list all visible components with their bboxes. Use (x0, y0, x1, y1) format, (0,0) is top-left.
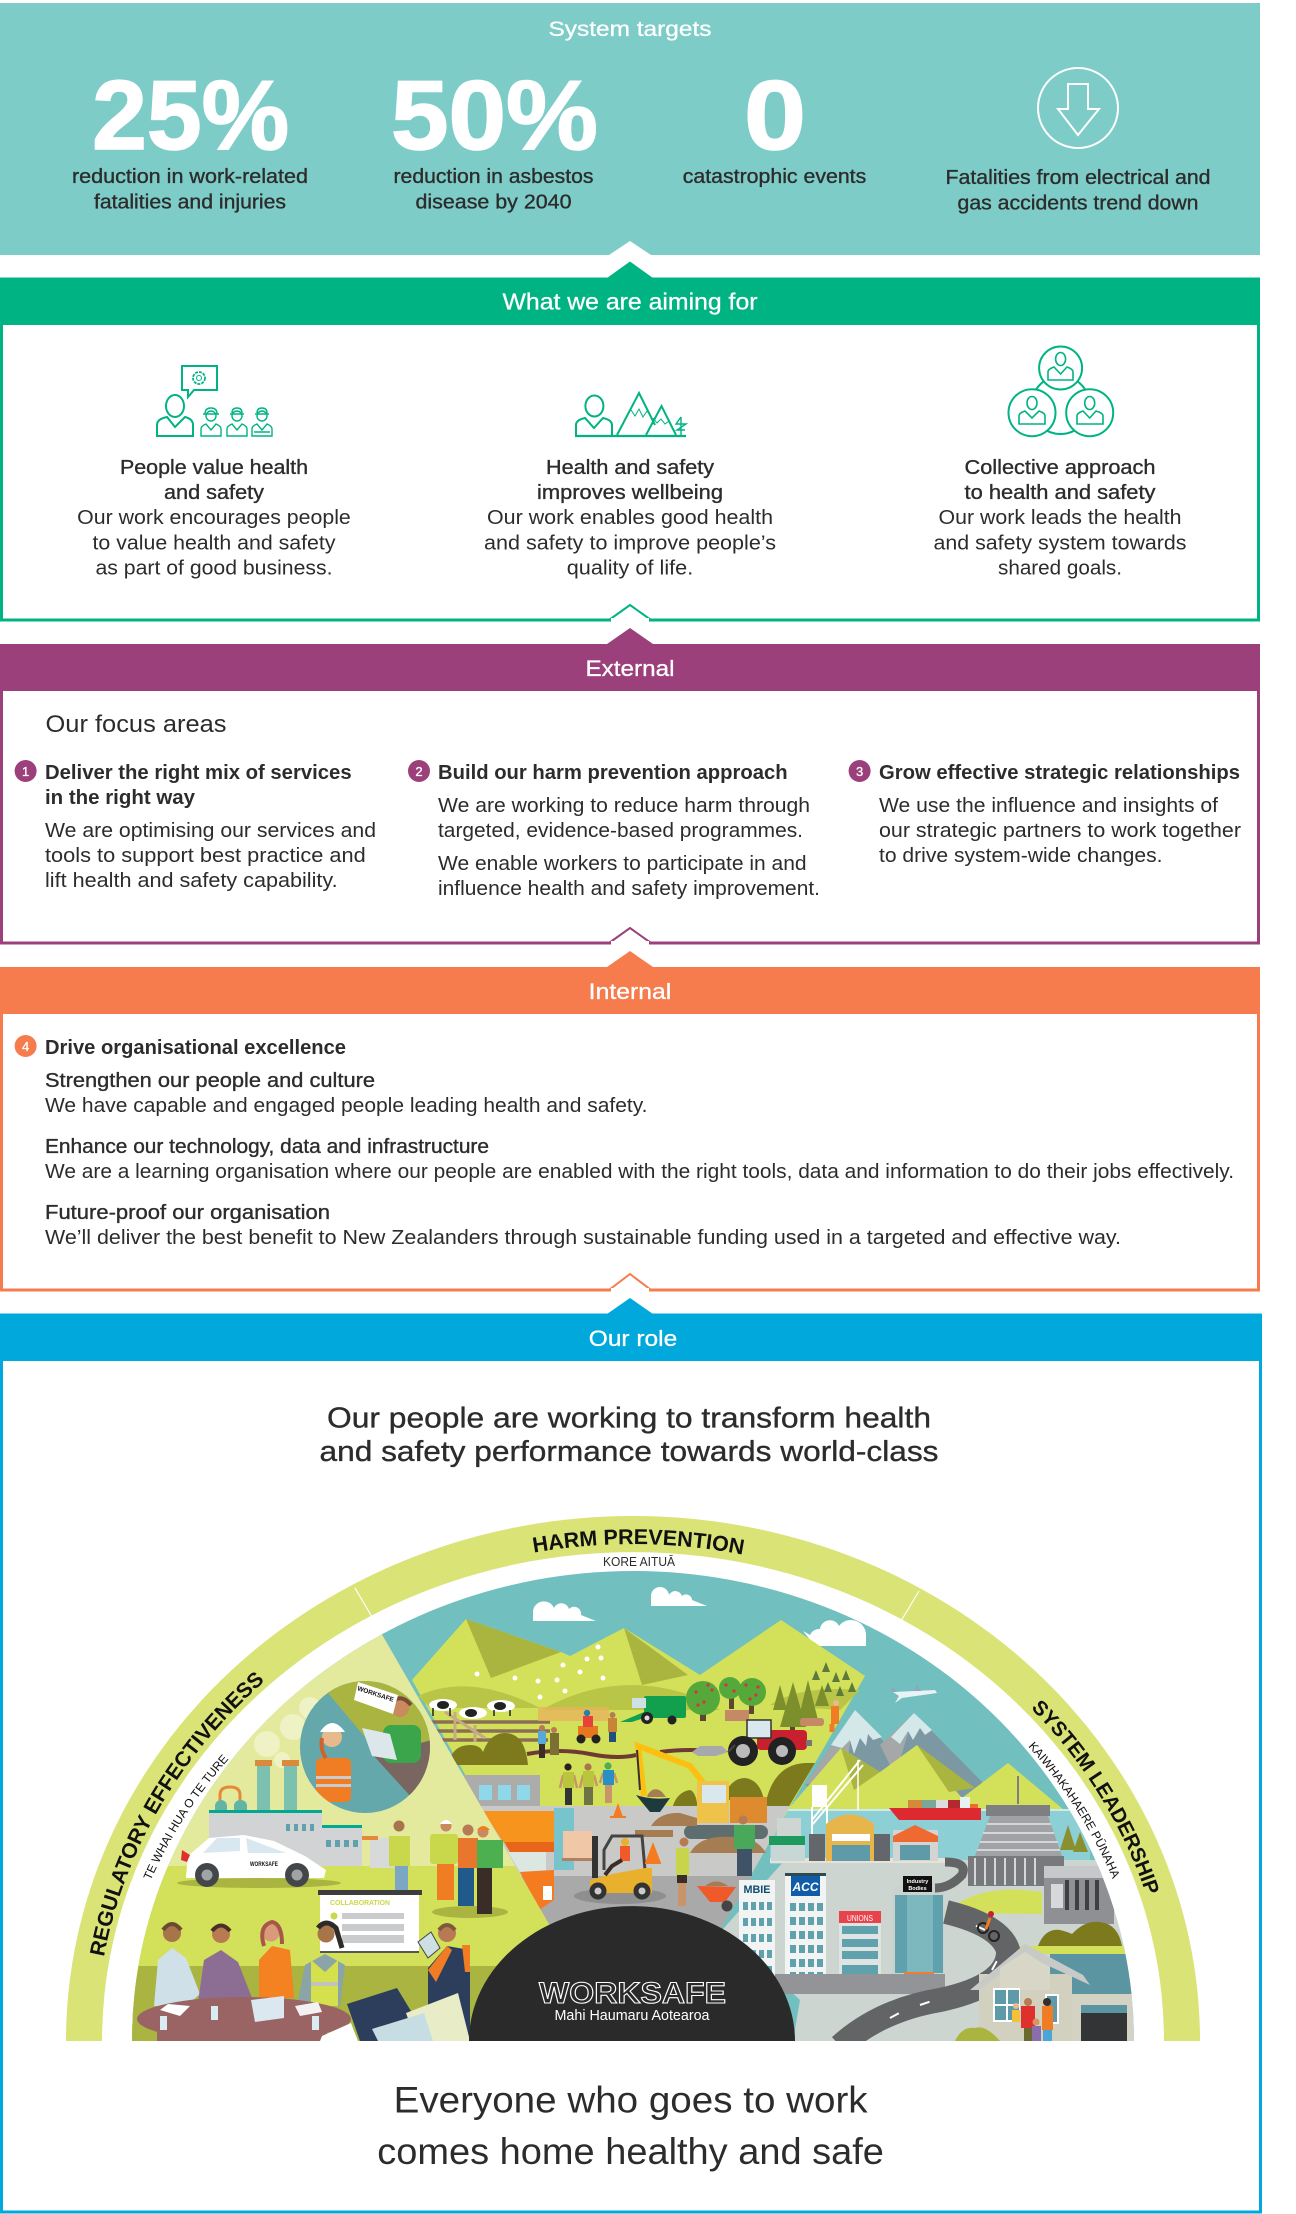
statement: transform performance: Our people are working to transform health (327, 1402, 931, 1434)
subheading: our focus areas: Our focus areas (46, 711, 226, 738)
focus area 4: Enhance our technology, data and infrastructure (45, 1136, 489, 1158)
mountains: snow peaks (805, 1710, 982, 1797)
house and family (955, 1944, 1132, 2041)
column: health and safety improves wellbeing: quality of life. (567, 558, 693, 580)
focus area 1 (15, 760, 376, 892)
worksafe logo dome: WORKSAFE (539, 1977, 726, 2010)
table and laptop (137, 1996, 351, 2042)
target: 25 percent: fatalities and injuries (94, 192, 286, 214)
column: health and safety improves wellbeing: and safety to improve people’s (484, 532, 776, 554)
plane (891, 1685, 937, 1703)
target: 50 percent (391, 60, 598, 214)
focus area 2: targeted, evidence-based programmes. (438, 820, 803, 842)
car (177, 1835, 341, 1888)
logger and logs (800, 1700, 839, 1732)
target: fatalities trend down (946, 68, 1210, 214)
pallet (562, 1831, 592, 1861)
regulatory effectiveness wedge (132, 1634, 550, 2041)
closing statement (377, 2080, 884, 2172)
tractor and plough (692, 1720, 812, 1766)
farm people and quad (538, 1710, 617, 1805)
mounds and ridge (448, 1733, 815, 1813)
column: collective approach: Collective approach (964, 457, 1156, 479)
workers and wheelbarrow (676, 1816, 755, 1912)
hills: right (788, 1745, 1063, 1809)
focus area 3: Grow effective strategic relationships (879, 762, 1240, 784)
central yard (481, 1806, 790, 1928)
focus area 1: in the right way (45, 787, 196, 809)
building: industry bodies: Bodies (908, 1886, 927, 1892)
building: ACC (785, 1873, 826, 1985)
column: health and safety improves wellbeing: Our work enables good health (487, 507, 773, 529)
target: zero catastrophic events: catastrophic events (683, 166, 866, 188)
forklift (574, 1836, 666, 1904)
column: people value health and safety: as part of good business. (96, 558, 332, 580)
focus area 3: to drive system-wide changes. (879, 845, 1162, 867)
heading: internal: Internal (589, 979, 671, 1004)
collaboration board (318, 1890, 422, 1953)
target: 50 percent: reduction in asbestos (394, 166, 594, 188)
focus area 2 (408, 760, 820, 900)
focus area 2: Build our harm prevention approach (438, 762, 788, 784)
heading: system targets: System targets (548, 18, 712, 41)
label: kore aitua: KORE AITUĀ (603, 1555, 676, 1569)
inset circle: response centre (298, 1680, 432, 1814)
heading: aiming for: What we are aiming for (502, 288, 758, 314)
focus area 1: 1 (22, 764, 29, 779)
icon: person and mountains (575, 393, 686, 436)
worksafe logo dome: Mahi Haumaru Aotearoa (554, 2008, 710, 2024)
focus area 4: Drive organisational excellence (45, 1037, 346, 1059)
icon: people with speech bubble (157, 366, 272, 436)
focus area 1: tools to support best practice and (45, 845, 366, 867)
panel: system targets (0, 3, 1260, 255)
column: people value health and safety (77, 366, 351, 580)
statement: transform performance: and safety performance towards world-class (320, 1436, 938, 1468)
man at laptop (362, 1698, 421, 1763)
label: system leadership: SYSTEM LEADERSHIP (1033, 1700, 1158, 1892)
focus area 4: Future-proof our organisation (45, 1202, 330, 1224)
building: unions (839, 1911, 881, 1974)
panel: external focus areas (0, 628, 1260, 945)
shops row and crane (769, 1760, 945, 1863)
system leadership ground (723, 1860, 1140, 2041)
excavator (635, 1746, 768, 1853)
building: MBIE: MBIE (744, 1884, 770, 1896)
column: people value health and safety: to value health and safety (92, 532, 336, 554)
column: people value health and safety: People value health (120, 457, 308, 479)
orchard trees (686, 1677, 766, 1721)
wheat patch (538, 1707, 609, 1721)
target: 25 percent: reduction in work-related (72, 166, 308, 188)
worksafe logo dome (469, 1906, 795, 2041)
focus area 1: We are optimising our services and (45, 820, 376, 842)
team around table (154, 1922, 345, 2006)
icon: down arrow in circle (1038, 68, 1118, 148)
target: fatalities trend down: Fatalities from electrical and (946, 167, 1210, 189)
harvester (620, 1696, 686, 1724)
sheep (474, 1644, 606, 1700)
traffic cones (610, 1803, 661, 1864)
pine trees (773, 1662, 856, 1732)
brochures (320, 1988, 470, 2041)
column: health and safety improves wellbeing: improves wellbeing (537, 482, 723, 504)
central fields and hills (412, 1619, 865, 1873)
column: people value health and safety: Our work encourages people (77, 507, 351, 529)
column: health and safety improves wellbeing (484, 393, 776, 580)
column: collective approach: Our work leads the health (938, 507, 1182, 529)
label: kaiwhakahaere punaha: KAIWHAKAHAERE PŪNAHA (1028, 1742, 1119, 1880)
focus area 2: influence health and safety improvement. (438, 878, 820, 900)
building: unions: UNIONS (847, 1913, 873, 1923)
heading: our role: Our role (589, 1326, 677, 1351)
focus area 4 (15, 1035, 1234, 1249)
focus area 4: We’ll deliver the best benefit to New Zealanders through sustainable funding used in a targeted and effective way. (45, 1227, 1121, 1249)
clouds (533, 1587, 866, 1646)
column: collective approach (934, 346, 1186, 580)
statement: transform performance (320, 1402, 938, 1468)
focus area 3: our strategic partners to work together (879, 820, 1241, 842)
focus area 4: Strengthen our people and culture (45, 1070, 375, 1092)
target: 25 percent (72, 60, 308, 214)
column: collective approach: to health and safety (964, 482, 1156, 504)
focus area 1: Deliver the right mix of services (45, 762, 352, 784)
focus area 3 (849, 760, 1241, 867)
focus area 3: We use the influence and insights of (879, 795, 1218, 817)
focus area 4: We have capable and engaged people leading health and safety. (45, 1095, 648, 1117)
illustration: work scene dome (132, 1571, 1134, 2041)
column: health and safety improves wellbeing: Health and safety (546, 457, 714, 479)
target: zero catastrophic events: 0 (744, 60, 806, 170)
worker with tablet (418, 1924, 470, 2040)
focus area 2: We are working to reduce harm through (438, 795, 810, 817)
focus area 4: 4 (22, 1039, 29, 1054)
building: industry bodies (895, 1876, 943, 1974)
target: 25 percent: 25% (92, 60, 289, 170)
building: ACC: ACC (792, 1880, 819, 1894)
panel: internal (0, 951, 1260, 1292)
target: 50 percent: 50% (391, 60, 598, 170)
focus area 3: 3 (856, 764, 863, 779)
heading: external: External (586, 656, 674, 681)
closing statement: Everyone who goes to work (394, 2080, 868, 2120)
inspector (389, 1820, 410, 1892)
office buildings (739, 1873, 943, 1976)
panel: our role (0, 1298, 1262, 2214)
focus area 4: We are a learning organisation where our people are enabled with the right tools, data and information to do their jobs effectively. (45, 1161, 1234, 1183)
smokestacks and factory (209, 1697, 394, 1868)
arc band: three pillars (66, 1516, 1200, 2041)
collaboration board: COLLABORATION (330, 1900, 390, 1907)
focus area 1: lift health and safety capability. (45, 870, 338, 892)
car: WORKSAFE (250, 1862, 278, 1868)
focus area 2: 2 (415, 764, 423, 779)
building: grey shed (462, 1775, 540, 1806)
water and ship (770, 1797, 1090, 1864)
column: people value health and safety: and safety (164, 482, 264, 504)
beehive and parliament (968, 1776, 1114, 1924)
target: 50 percent: disease by 2040 (416, 192, 572, 214)
focus area 2: We enable workers to participate in and (438, 853, 807, 875)
label: harm prevention: HARM PREVENTION (532, 1529, 744, 1554)
column: collective approach: and safety system towards (934, 532, 1186, 554)
label: regulatory effectiveness: REGULATORY EFFECTIVENESS (90, 1672, 263, 1956)
closing statement: comes home healthy and safe (377, 2131, 884, 2172)
target: zero catastrophic events (683, 60, 866, 188)
group of site workers (430, 1820, 508, 1918)
panel: what we are aiming for (0, 262, 1260, 622)
icon: three connected people (1008, 346, 1113, 436)
sign: response centre: WORKSAFE (356, 1685, 395, 1704)
woman with hard hat (316, 1723, 351, 1802)
cyclist (978, 1911, 999, 1941)
road (739, 1862, 1008, 2046)
building: industry bodies: Industry (907, 1879, 929, 1885)
building: MBIE (739, 1880, 775, 1986)
truck (483, 1808, 574, 1910)
fence and cows (429, 1699, 550, 1742)
column: collective approach: shared goals. (998, 558, 1122, 580)
target: fatalities trend down: gas accidents trend down (958, 192, 1198, 214)
label: te whai hua o te ture: TE WHAI HUA O TE TURE (143, 1754, 228, 1878)
lawn and bushes (944, 1890, 1135, 1994)
